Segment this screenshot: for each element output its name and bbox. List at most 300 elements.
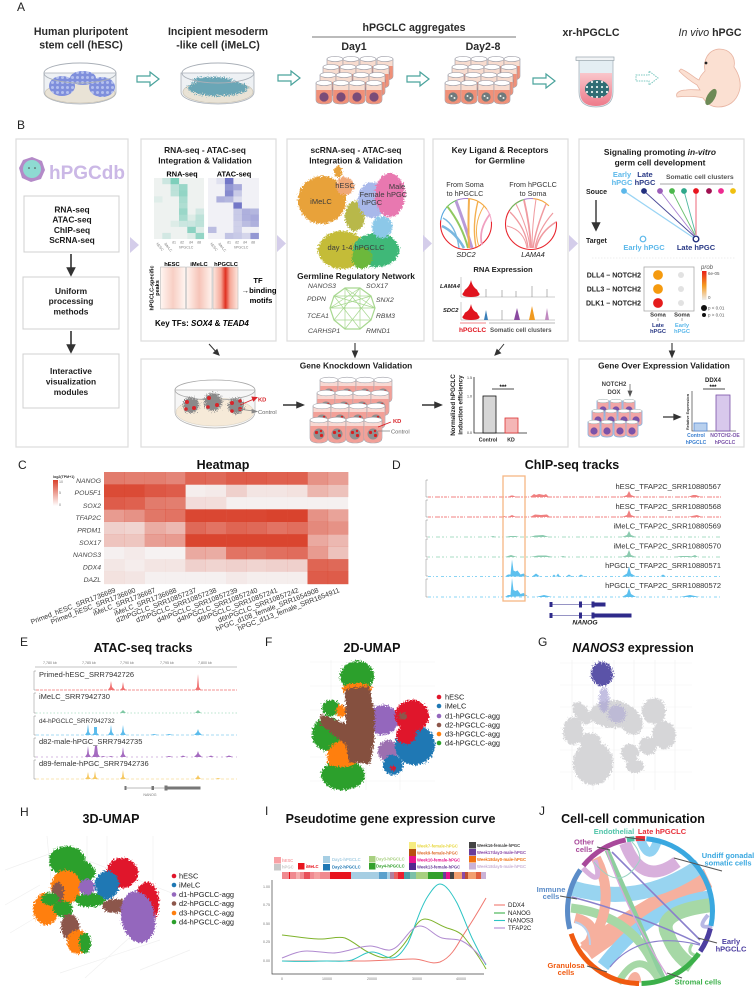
- gene model: [125, 786, 200, 790]
- grid: [5, 836, 190, 978]
- bar chart: KD efficiency: Control: [479, 438, 498, 444]
- panel letter F: F: [265, 635, 272, 649]
- label: iMeLC: Incipient mesoderm: [168, 26, 268, 38]
- peak heatmaps: [150, 262, 239, 310]
- UMAP labels: hPGC: [362, 198, 383, 207]
- gene labels: TFAP2C: [75, 515, 101, 522]
- stage legend: Week9-female-hPGC: [417, 850, 458, 856]
- arrow: [352, 343, 358, 357]
- arrow: [533, 74, 555, 88]
- curve legend: NANOG: [508, 910, 531, 917]
- curve legend: DDX4: [508, 902, 525, 909]
- panel J: cell-cell communication: [537, 804, 754, 986]
- sample labels: [30, 587, 341, 633]
- track labels: d89-female-hPGC_SRR7942736: [39, 759, 149, 768]
- box: visualization: Interactive: [50, 366, 92, 376]
- KD arrow: [378, 422, 391, 427]
- box: visualization: modules: [54, 387, 89, 397]
- control arrow: [238, 409, 257, 413]
- track: iMeLC: [428, 531, 722, 557]
- label: clusters: Somatic cell clusters: [666, 174, 734, 181]
- legend: [172, 872, 234, 926]
- panel: hPGCdb sidebar: [16, 139, 128, 447]
- sample labels: Primed_hESC_SRR1736690: [50, 587, 137, 626]
- chord gene labels: SDC2: [456, 250, 476, 259]
- chart axes: 0.00: [263, 959, 270, 963]
- heading: germline network: Germline Regulatory Network: [297, 271, 415, 281]
- track: d89 female: [36, 770, 237, 779]
- sector labels: somatic cells: [704, 858, 752, 868]
- gene labels: POU5F1: [75, 490, 101, 497]
- bar chart: DDX4: hPGCLC: [715, 440, 736, 446]
- sub heading: RNA-seq: [166, 170, 198, 178]
- dot plot columns: hPGC: [650, 329, 667, 335]
- panel: ligand receptors: [433, 139, 568, 341]
- chord: LAMA4: [506, 198, 556, 250]
- panel A: differentiation workflow: [17, 0, 742, 107]
- dot plot columns: Late: [652, 323, 664, 329]
- legend: d4-hPGCLC-agg: [445, 738, 500, 748]
- label: sources: hPGC: [612, 178, 633, 187]
- arrow: [130, 237, 139, 253]
- stage legend: iMeLC: [306, 864, 319, 869]
- network graph: RBM3: [376, 313, 395, 320]
- track labels: iMeLC_TFAP2C_SRR10880569: [613, 522, 721, 530]
- highlight box: [503, 476, 525, 601]
- dot plot: [586, 267, 694, 311]
- sample labels: iMeLC_SRR1736688: [113, 587, 178, 618]
- box: uniform processing: processing: [49, 296, 93, 306]
- arrow: [68, 254, 74, 275]
- heatmap axis labels: hESC: [155, 242, 165, 252]
- panel H: 3D-UMAP: [5, 805, 234, 978]
- gene model: [550, 602, 631, 618]
- coordinate axis: 7,780 kb: [43, 661, 57, 665]
- sub heading: ATAC-seq: [217, 170, 252, 178]
- dot plot columns: hPGC: [674, 329, 691, 335]
- box: uniform processing: methods: [54, 306, 89, 316]
- sample labels: d6hPGCLC_SRR10857242: [217, 587, 300, 625]
- panel: RNA/ATAC integration: [141, 139, 277, 341]
- UMAP: 3D clusters: [33, 846, 159, 954]
- curve: DDX4: [282, 898, 486, 963]
- box: uniform processing: Uniform: [55, 286, 87, 296]
- heading: scRNA-seq - ATAC-seq: [310, 145, 402, 155]
- grid: [310, 660, 435, 790]
- sample labels: d2hPGCLC_SRR10857237: [115, 587, 198, 625]
- icon: Day1 aggregate tubes: [316, 56, 393, 104]
- stage legend: Week13-female-hPGC: [417, 864, 460, 870]
- label: From hPGCLC: [509, 180, 557, 189]
- stage legend: Week18day5-male-hPGC: [477, 864, 526, 869]
- heatmap axis labels: d4: [243, 240, 247, 244]
- heatmap axis labels: hPGCLC: [234, 246, 249, 250]
- panel letter B: B: [17, 118, 25, 132]
- bar chart: KD efficiency: 1.0: [467, 394, 472, 398]
- panel: gene knockdown: [141, 359, 568, 447]
- heading: Gene Over Expression Validation: [598, 360, 730, 370]
- panel E: ATAC-seq tracks: [20, 635, 237, 797]
- dot plot legend: 6e-05: [708, 271, 720, 276]
- UMAP: atlas: [298, 166, 405, 269]
- heatmap axis labels: d1: [172, 240, 176, 244]
- UMAP labels: iMeLC: [310, 197, 332, 206]
- leader ticks: [560, 837, 722, 978]
- title: ChIP-seq tracks: [525, 458, 619, 472]
- UMAP: grey cells: [563, 698, 676, 785]
- sector labels: Granulosa: [547, 961, 585, 970]
- violin plots: LAMA4: [440, 284, 461, 290]
- panel: signaling: [579, 139, 744, 341]
- logo: hPGCdb: hPGCdb: [49, 163, 125, 184]
- heatmap legend: [53, 475, 75, 507]
- legend: d1-hPGCLC-agg: [445, 712, 500, 720]
- UMAP: brown core: [320, 686, 375, 764]
- UMAP labels: hPGC: [387, 190, 408, 199]
- box: visualization: [23, 354, 119, 408]
- sample labels: hPGC_d108_female_SRR1654908: [215, 587, 320, 633]
- arrow: [495, 344, 504, 355]
- track labels: hESC_TFAP2C_SRR10880568: [616, 502, 721, 511]
- legend: hESC: [179, 872, 199, 880]
- icon: dish with cells: [175, 380, 255, 428]
- label: hESC: stem cell (hESC): [39, 40, 123, 52]
- coordinate axis: 7,790 kb: [120, 661, 134, 665]
- box: data types: RNA-seq: [54, 204, 90, 214]
- sector labels: Early: [722, 937, 740, 946]
- label: xr-hPGCLC: xr-hPGCLC: [562, 27, 620, 39]
- dotted arrow: [636, 71, 658, 85]
- peak heatmaps: hPGCLC: [214, 262, 239, 268]
- gene labels: NANOG: [76, 478, 101, 485]
- heading: hPGCLC aggregates: hPGCLC aggregates: [362, 22, 466, 34]
- violin plots: [440, 277, 555, 334]
- arrow: [283, 402, 303, 408]
- title: 2D-UMAP: [344, 641, 400, 655]
- dot plot: DLL3 − NOTCH2: [587, 286, 641, 294]
- label: key TFs: Key TFs: SOX4 & TEAD4: [155, 319, 249, 328]
- bar chart: KD efficiency: Normalized hPGCLC: [450, 374, 457, 436]
- panel C: heatmap: [18, 458, 348, 633]
- box: data types: [24, 196, 119, 252]
- chart axes: 10000: [322, 977, 332, 981]
- arrow: [670, 343, 674, 357]
- heatmap axis labels: d1: [227, 240, 231, 244]
- heading: germ cell development: [615, 158, 706, 168]
- panel letter E: E: [20, 635, 28, 649]
- dot plot legend: [700, 265, 725, 318]
- UMAP labels: day 1-4 hPGCLC: [327, 243, 385, 252]
- heatmap axis labels: d2: [235, 240, 239, 244]
- signaling network: Early hPGC: [623, 243, 665, 252]
- violin plots: SDC2: [443, 308, 459, 314]
- gene label: NANOG: [572, 620, 598, 626]
- gene labels: DDX4: [83, 564, 101, 572]
- KD arrow: [240, 397, 257, 405]
- chart axes: 20000: [367, 977, 377, 981]
- label: TF binding motifs: motifs: [250, 296, 272, 305]
- dot plot legend: 0: [708, 295, 711, 300]
- stage bar: [282, 872, 486, 879]
- heatmap grid: [104, 472, 348, 584]
- legend: iMeLC: [179, 880, 201, 890]
- panel letter G: G: [538, 635, 547, 649]
- panel D: ChIP-seq tracks: [392, 458, 722, 626]
- heatmap: RNA-seq: [154, 178, 204, 239]
- label: sources: hPGC: [635, 178, 656, 187]
- logo: hPGCdb: [19, 157, 125, 184]
- chart axes: 0.75: [263, 903, 270, 907]
- heading: Integration & Validation: [158, 156, 252, 166]
- chord sectors: [568, 838, 712, 984]
- coordinate axis: 7,795 kb: [160, 661, 174, 665]
- network graph: NANOS3: [308, 283, 336, 290]
- UMAP labels: Female: [359, 190, 385, 199]
- track labels: [605, 482, 721, 590]
- stage legend: Week7-female-hPGC: [417, 844, 458, 848]
- title: Heatmap: [197, 458, 250, 472]
- panel F: 2D-UMAP: [265, 635, 500, 790]
- title: Pseudotime gene expression curve: [286, 812, 495, 826]
- box: data types: ATAC-seq: [52, 215, 92, 225]
- arrow: [278, 71, 300, 85]
- icon: hESC dish: [44, 63, 116, 104]
- curve: TFAP2C: [282, 926, 486, 964]
- legend: hESC: [445, 692, 465, 702]
- panel letter H: H: [20, 805, 29, 819]
- arrow: [209, 344, 219, 355]
- heading: RNA expression: RNA Expression: [473, 265, 533, 274]
- stage legend: hESC: [282, 858, 293, 863]
- heading: for Germline: [475, 156, 525, 166]
- coordinate axis: 7,785 kb: [82, 661, 96, 665]
- title: Cell-cell communication: [561, 812, 705, 826]
- track labels: hPGCLC_TFAP2C_SRR10880571: [605, 561, 721, 570]
- arrow: [663, 414, 680, 420]
- heatmap axis labels: [155, 240, 255, 253]
- arrow: [277, 235, 286, 252]
- chord ribbons: [571, 838, 712, 983]
- label: sources: Early: [613, 170, 631, 179]
- track labels: d82-male-hPGC_SRR7942735: [39, 737, 142, 746]
- label: Day2-8: Day2-8: [466, 41, 500, 53]
- label: TF binding motifs: TF: [253, 276, 263, 285]
- heatmap legend: 0: [59, 503, 61, 507]
- dot plot columns: Soma: [650, 312, 667, 318]
- track labels: d4-hPGCLC_SRR7942732: [39, 718, 115, 725]
- stage legend: Week17day3-male-hPGC: [477, 850, 526, 855]
- heatmap axis labels: hPGCLC: [179, 246, 194, 250]
- sector labels: [537, 827, 754, 986]
- panel I: pseudotime curve: [263, 804, 534, 981]
- track labels: iMeLC_TFAP2C_SRR10880570: [613, 542, 721, 550]
- label: in vivo hPGC: In vivo hPGC: [678, 27, 742, 39]
- dot plot: DLK1 − NOTCH2: [586, 300, 641, 308]
- panel letter I: I: [265, 804, 268, 818]
- dot plot columns: Soma: [674, 312, 691, 318]
- chart axes: 0.25: [263, 940, 270, 944]
- arrow: [422, 402, 441, 408]
- stage legend: Week10-female-hPGC: [417, 858, 460, 862]
- violin plots: hPGCLC: [459, 327, 486, 334]
- legend: d3-hPGCLC-agg: [179, 908, 234, 918]
- title: NANOS3 expression: [572, 641, 694, 655]
- track: primed hESC: [36, 674, 237, 690]
- bar chart: DDX4: Relative Expression: [686, 393, 690, 430]
- legend: d2-hPGCLC-agg: [179, 899, 234, 908]
- arrow: source to target: [592, 200, 600, 230]
- chart axes: [263, 880, 484, 981]
- heading: Signaling promoting in-vitro: [604, 147, 716, 157]
- legend: d1-hPGCLC-agg: [179, 890, 234, 899]
- bar chart: DDX4: ***: [709, 385, 717, 391]
- label: treatment: DOX: [607, 390, 621, 396]
- panel: scRNA/ATAC integration: [287, 139, 424, 341]
- network graph: PDPN: [307, 296, 326, 303]
- network graph: SNX2: [376, 297, 394, 304]
- sample labels: d6hPGCLC_SRR10857241: [196, 587, 279, 625]
- panel letter A: A: [17, 0, 25, 14]
- stage legend: Day4-hPGCLC: [376, 864, 405, 868]
- heatmap axis labels: d2: [180, 240, 184, 244]
- UMAP labels: Male: [389, 182, 405, 191]
- bar chart: DDX4: Control: [687, 433, 705, 439]
- sector labels: Immune: [537, 885, 565, 894]
- legend: d3-hPGCLC-agg: [445, 730, 500, 738]
- signaling network: [621, 188, 736, 252]
- label: control: Control: [258, 410, 277, 416]
- panel G: NANOS3 expression: [538, 635, 694, 790]
- label: target: Target: [586, 238, 608, 245]
- network graph: TCEA1: [307, 313, 329, 320]
- icon: xr-hPGCLC tube: [576, 57, 614, 107]
- UMAP labels: hESC: [335, 181, 355, 190]
- chart axes: 0.50: [263, 922, 270, 926]
- heading: Integration & Validation: [309, 156, 403, 166]
- label: iMeLC: -like cell (iMeLC): [176, 40, 260, 52]
- box: data types: ChIP-seq: [54, 225, 90, 235]
- stage legend: Day1-hPGCLC: [332, 857, 361, 862]
- heatmap axis labels: d8: [197, 240, 201, 244]
- legend: [437, 692, 500, 748]
- label: TF binding motifs: →binding: [241, 286, 277, 295]
- sector labels: Stromal cells: [675, 978, 721, 986]
- icon: iMeLC dish: [181, 63, 254, 104]
- bar chart: KD efficiency: induction efficiency: [458, 375, 464, 435]
- sample labels: iMeLC_SRR1736687: [92, 587, 157, 618]
- panel letter D: D: [392, 458, 401, 472]
- sample labels: Primed_hESC_SRR1736689: [30, 587, 117, 626]
- track: hESC: [428, 491, 722, 517]
- network graph: RMND1: [366, 328, 390, 335]
- heatmap axis labels: d4: [189, 240, 193, 244]
- chord: SDC2: [440, 198, 492, 250]
- label: control: Control: [391, 430, 410, 436]
- bar chart: DDX4: NOTCH2-OE: [710, 433, 740, 439]
- box: data types: ScRNA-seq: [49, 235, 95, 245]
- bar chart: DDX4: [686, 378, 740, 446]
- track: iMeLC: [36, 710, 237, 713]
- stage legend: hPGC: [282, 864, 294, 870]
- chart axes: 1.00: [263, 885, 270, 889]
- icon: embryo: [677, 49, 740, 107]
- track axes: [426, 480, 428, 597]
- curve legend: TFAP2C: [508, 925, 532, 932]
- sample labels: d4hPGCLC_SRR10857240: [176, 587, 259, 625]
- panel letter C: C: [18, 458, 27, 472]
- track labels: iMeLC_SRR7942730: [39, 692, 110, 701]
- gene labels: SOX2: [83, 503, 101, 510]
- gene labels: SOX17: [79, 540, 101, 547]
- dot plot legend: prob: [700, 265, 714, 271]
- legend: d2-hPGCLC-agg: [445, 720, 500, 730]
- label: hESC: Human pluripotent: [34, 26, 128, 38]
- heading: Key Ligand & Receptors: [452, 145, 548, 155]
- label: source: Souce: [586, 189, 607, 196]
- arrow: [569, 235, 578, 252]
- control arrow: [378, 430, 390, 432]
- sector labels: cells: [576, 845, 592, 854]
- stage legend: Week16-female-hPGC: [477, 843, 520, 848]
- arrow: [137, 72, 159, 86]
- sample labels: d2hPGCLC_SRR10857238: [135, 587, 218, 625]
- track: d4 hPGCLC: [36, 724, 237, 735]
- coordinate axis: 7,800 kb: [198, 661, 212, 665]
- dot plot legend: p > 0.01: [708, 312, 725, 318]
- box: uniform processing: [23, 277, 119, 329]
- sector labels: cells: [558, 968, 574, 977]
- label: KD: KD: [258, 398, 266, 404]
- coordinate axis: [35, 661, 237, 667]
- chart axes: 40000: [456, 977, 466, 981]
- track: d82 male: [36, 746, 237, 757]
- bar chart: DDX4: hPGCLC: [686, 440, 707, 446]
- bar chart: KD efficiency: ***: [499, 385, 507, 391]
- curve: NANOS3: [282, 884, 486, 965]
- dot plot legend: p < 0.01: [708, 306, 725, 310]
- sample labels: hPGC_d113_female_SRR1654911: [237, 587, 341, 633]
- chord gene labels: LAMA4: [521, 250, 545, 259]
- dot plot columns: [650, 312, 691, 335]
- bar chart: KD efficiency: 0.0: [467, 431, 472, 435]
- stage legend: [274, 842, 526, 870]
- peak heatmaps: hPGCLC-specific: [150, 266, 156, 310]
- dot plot: DLL4 − NOTCH2: [587, 272, 641, 280]
- label: From Soma: [446, 180, 484, 189]
- chart axes: 0: [281, 977, 283, 981]
- label: sources: Late: [637, 170, 653, 179]
- label: to hPGCLC: [447, 189, 483, 198]
- icon: Day2-8 aggregate tubes: [445, 56, 520, 104]
- legend: iMeLC: [445, 702, 467, 710]
- arrow: [628, 384, 632, 396]
- panel: gene over expression: [579, 359, 744, 447]
- sector labels: hPGCLC: [716, 944, 747, 954]
- panel B: database overview: [16, 118, 744, 447]
- UMAP: NANOS3 expression cells: [591, 662, 626, 723]
- heatmap axis labels: iMeLC: [217, 242, 227, 253]
- peak heatmaps: iMeLC: [190, 262, 209, 268]
- bar chart: KD efficiency: KD: [507, 438, 515, 444]
- track labels: [39, 670, 149, 768]
- sample labels: d4hPGCLC_SRR10857239: [156, 587, 239, 625]
- arrow: [407, 72, 429, 86]
- bracket line: [312, 36, 516, 38]
- panel letter J: J: [539, 804, 545, 818]
- network graph: CARHSP1: [308, 328, 340, 335]
- rule: [660, 183, 733, 185]
- bar chart: KD efficiency: 1.5: [467, 376, 472, 380]
